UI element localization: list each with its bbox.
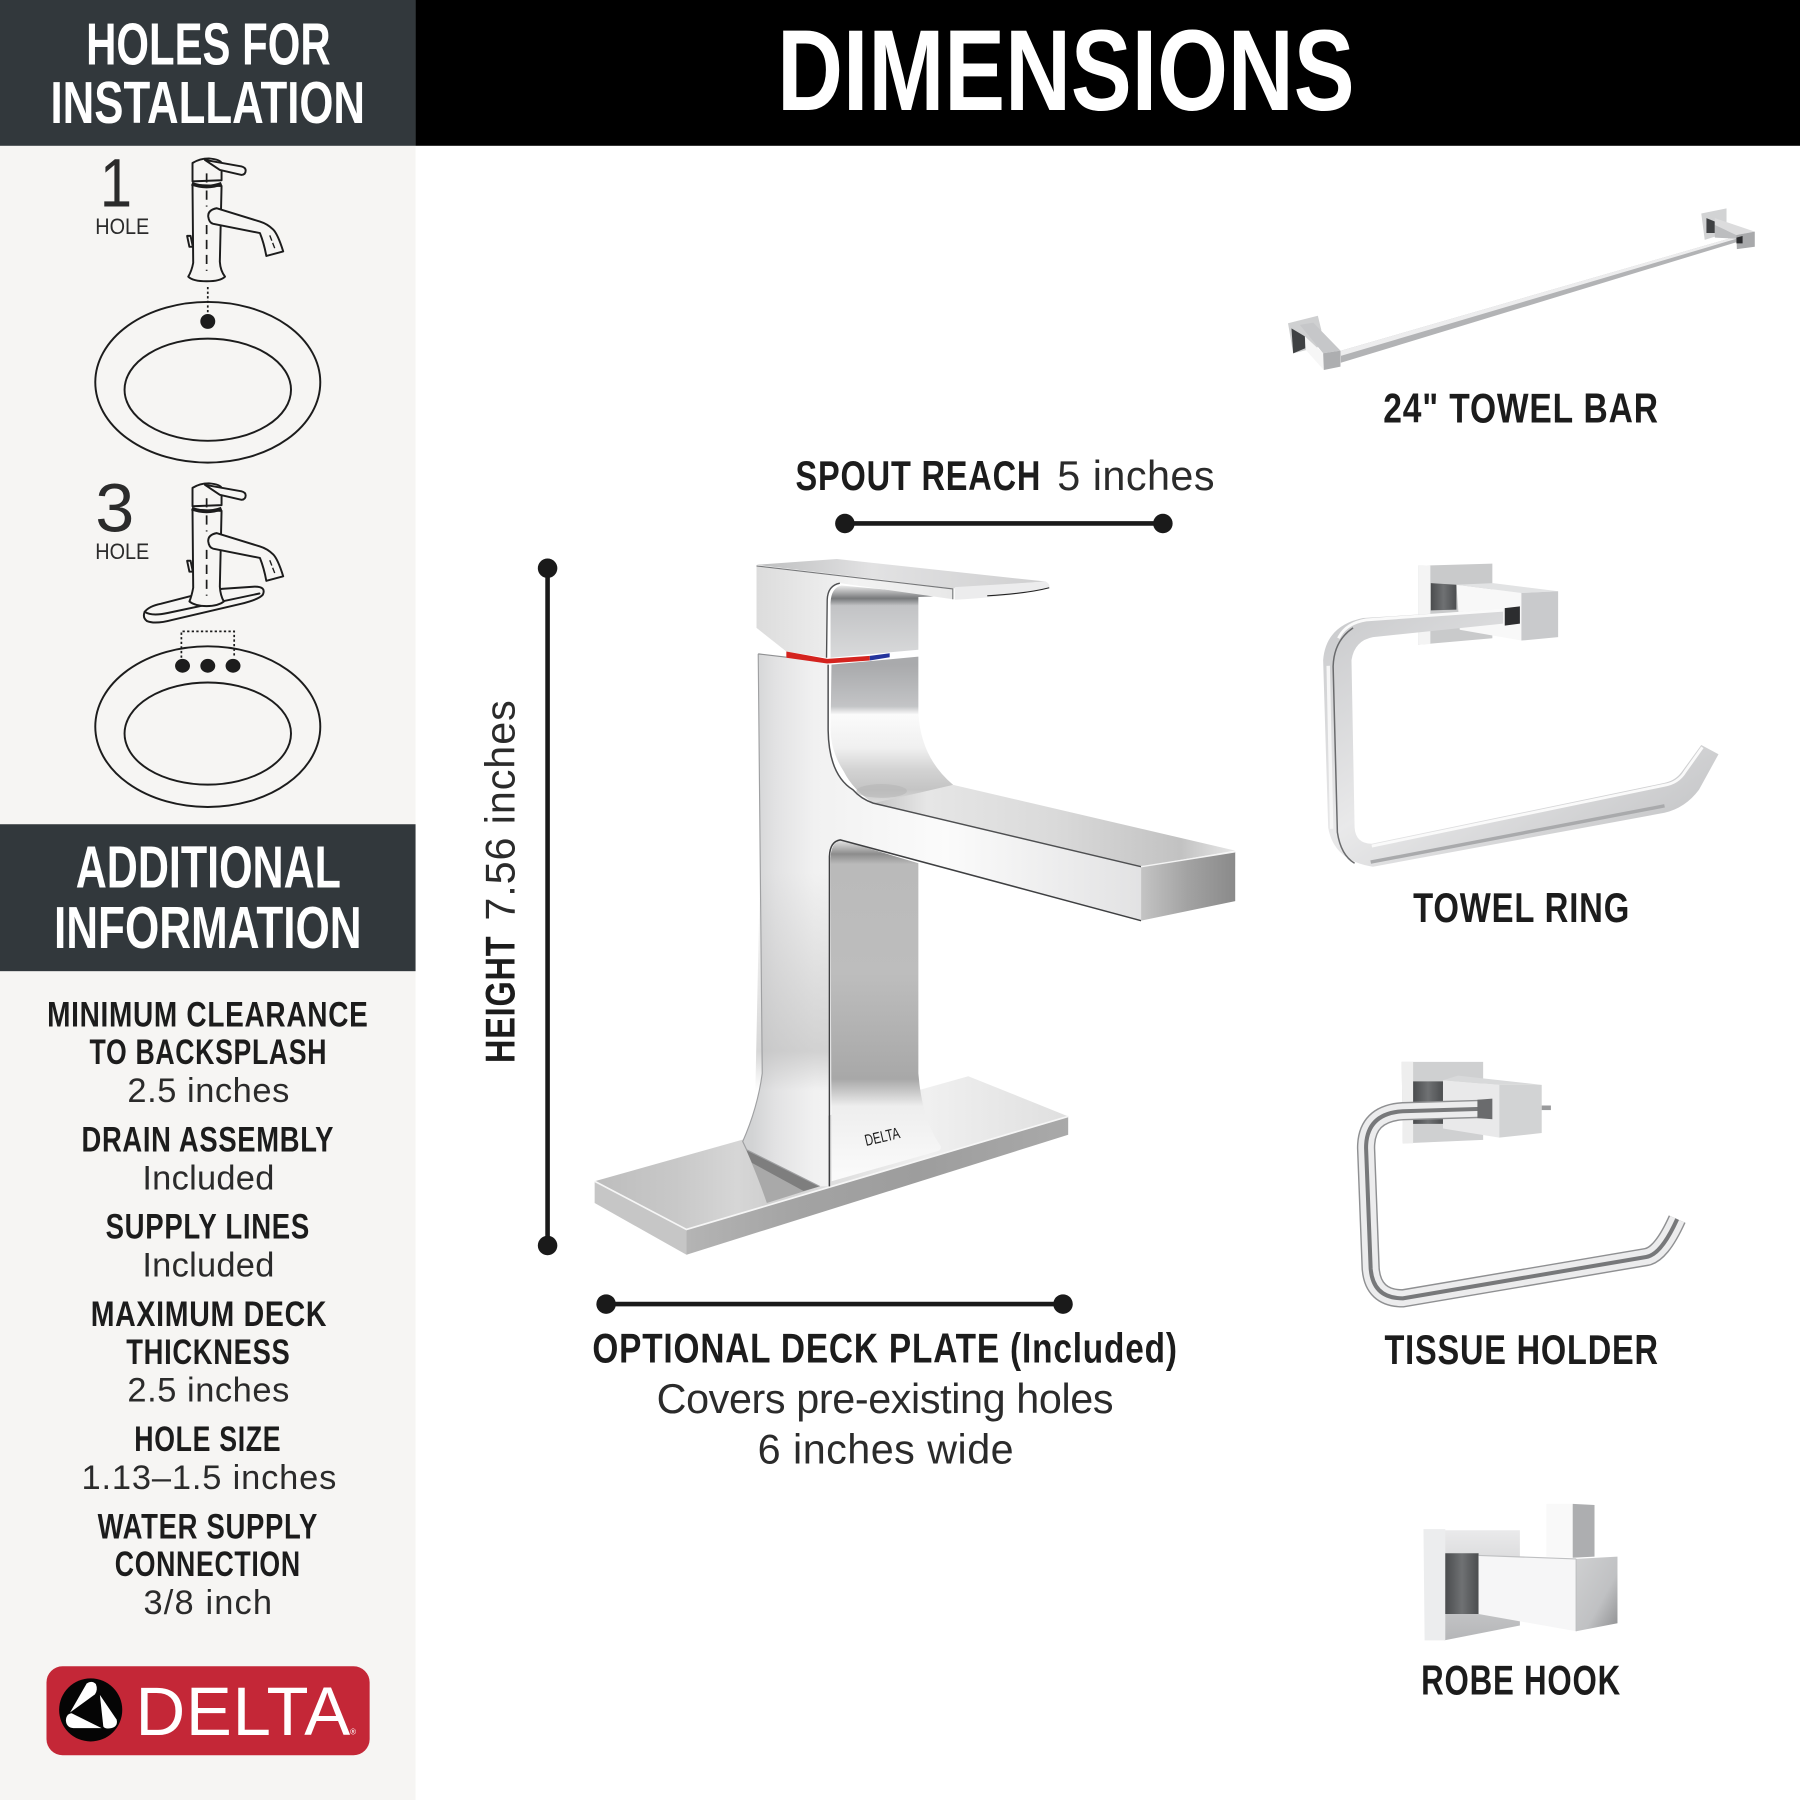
spec list [47, 994, 368, 1622]
dimension: optional deck plate: OPTIONAL DECK PLATE (Included) [592, 1326, 1178, 1372]
logo: delta: DELTA [135, 1673, 350, 1750]
logo: delta: ® [350, 1728, 356, 1737]
dimension: spout reach [796, 453, 1215, 533]
accessory: towel bar [1288, 208, 1755, 431]
dimension: optional deck plate: 6 inches wide [758, 1427, 1014, 1473]
accessory: towel ring [1323, 564, 1718, 931]
spec: minimum clearance: TO BACKSPLASH [90, 1032, 327, 1072]
spec: drain assembly [82, 1119, 334, 1197]
dimension: height: HEIGHT [477, 936, 523, 1063]
header: holes for installation: INSTALLATION [51, 69, 365, 136]
diagram: 1 hole installation [95, 145, 320, 463]
accessory: tissue holder: TISSUE HOLDER [1384, 1327, 1659, 1373]
faucet product image [595, 559, 1235, 1255]
faucet body [743, 654, 1141, 1186]
diagram: 3 hole installation: 3 [95, 470, 134, 547]
dimension: height: 7.56 inches [477, 700, 523, 921]
spec: drain assembly: DRAIN ASSEMBLY [82, 1119, 334, 1159]
header: additional information: ADDITIONAL [76, 833, 341, 900]
lower column [830, 840, 941, 1181]
header: holes for installation: HOLES FOR [86, 10, 331, 77]
spec: water supply connection: 3/8 inch [143, 1584, 272, 1622]
diagram: 1 hole installation: 1 [100, 145, 132, 222]
header: additional information [0, 824, 416, 971]
spec: minimum clearance: 2.5 inches [127, 1072, 289, 1110]
accessory: robe hook [1421, 1504, 1621, 1703]
spout top face [873, 785, 1235, 867]
spec: maximum deck thickness: 2.5 inches [127, 1372, 289, 1410]
dimension: spout reach: 5 inches [1057, 453, 1215, 499]
title: dimensions: DIMENSIONS [777, 7, 1355, 135]
spec: supply lines [106, 1207, 310, 1285]
header: additional information: INFORMATION [54, 894, 362, 961]
handle [757, 559, 1049, 658]
diagram: 1 hole installation: HOLE [95, 214, 149, 239]
spec: water supply connection: WATER SUPPLY [98, 1506, 318, 1546]
dimension: spout reach: SPOUT REACH [796, 453, 1041, 499]
spec: hole size: 1.13–1.5 inches [82, 1459, 336, 1497]
accessory: towel ring: TOWEL RING [1413, 885, 1630, 931]
spec: hole size [82, 1419, 336, 1497]
spec: maximum deck thickness: MAXIMUM DECK [91, 1294, 327, 1334]
spec: hole size: HOLE SIZE [134, 1419, 281, 1459]
spec: supply lines: Included [142, 1247, 274, 1285]
spec: minimum clearance [47, 994, 368, 1110]
spec: minimum clearance: MINIMUM CLEARANCE [47, 994, 368, 1034]
deck plate [595, 1076, 1068, 1255]
panel: sidebar background [0, 0, 416, 1800]
spec: drain assembly: Included [142, 1159, 274, 1197]
dimension: height [477, 558, 557, 1255]
dimension: optional deck plate [592, 1294, 1178, 1473]
diagram: 3 hole installation: HOLE [95, 539, 149, 564]
spec: maximum deck thickness: THICKNESS [126, 1332, 290, 1372]
accessory: tissue holder [1366, 1062, 1677, 1373]
spout end [1141, 852, 1235, 921]
faucet logo: DELTA [863, 1124, 902, 1150]
spec: water supply connection: CONNECTION [115, 1544, 301, 1584]
spec: maximum deck thickness [91, 1294, 327, 1410]
logo: delta [46, 1666, 370, 1755]
diagram: 3 hole installation [95, 470, 320, 807]
accessory: robe hook: ROBE HOOK [1421, 1657, 1621, 1703]
accessory: towel bar: 24" TOWEL BAR [1383, 385, 1659, 431]
title: dimensions [416, 0, 1800, 146]
temperature band [786, 651, 890, 664]
header: holes for installation [0, 0, 416, 146]
faucet back column [831, 657, 953, 803]
dimension: optional deck plate: Covers pre-existing holes [657, 1376, 1114, 1422]
spec: supply lines: SUPPLY LINES [106, 1207, 310, 1247]
spec: water supply connection [98, 1506, 318, 1622]
